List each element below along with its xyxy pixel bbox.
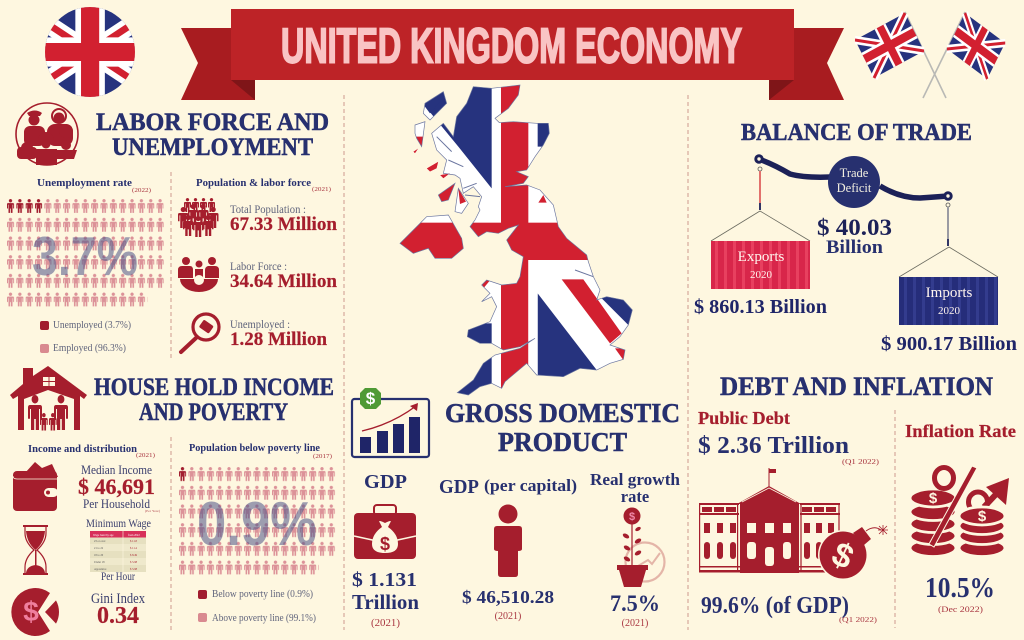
stat: unemployed bbox=[230, 319, 328, 350]
map outline accents bbox=[400, 85, 632, 395]
panel: household income and poverty bbox=[10, 366, 336, 636]
stat column: real growth rate: (2021) bbox=[622, 618, 648, 629]
stat: unemployed: Unemployed : bbox=[230, 319, 290, 331]
stat: 3.7%: 3.7% bbox=[32, 225, 138, 287]
stat: public debt: $ 2.36 Trillion bbox=[698, 433, 849, 459]
stat: minimum wage table: $ 8.49 bbox=[130, 554, 138, 557]
icon: gini pie: $ bbox=[23, 596, 39, 627]
subheading: population and labor force: (2021) bbox=[312, 186, 331, 193]
icon: money plant bbox=[617, 508, 664, 587]
panel: gross domestic product bbox=[352, 388, 680, 629]
stat column: real growth rate: rate bbox=[621, 487, 649, 506]
heading: inflation rate: Inflation Rate bbox=[905, 421, 1016, 441]
stat: minimum wage table: 18 to 20 bbox=[94, 554, 104, 557]
subheading: population and labor force bbox=[196, 177, 331, 193]
container: imports: Imports bbox=[926, 285, 972, 301]
heading: labor force: LABOR FORCE AND bbox=[96, 107, 329, 136]
stat column: gdp per capita: GDP bbox=[439, 476, 479, 498]
stat: minimum wage table: Wage band by age bbox=[93, 534, 114, 537]
title: UNITED KINGDOM ECONOMY bbox=[281, 20, 742, 74]
stat column: gdp: Trillion bbox=[352, 590, 419, 614]
subheading: income and distribution bbox=[28, 443, 155, 459]
chart: unemployment pictogram bbox=[7, 199, 164, 306]
stat: labor force bbox=[230, 261, 338, 292]
stat: trade deficit: Billion bbox=[826, 237, 883, 258]
heading: household income bbox=[94, 374, 334, 426]
stat: debt to gdp: 99.6% (of GDP) bbox=[701, 593, 849, 619]
stat column: gdp per capita: (2021) bbox=[495, 611, 521, 622]
label: trade deficit bbox=[837, 166, 872, 195]
stat column: gdp: $ 1.131 bbox=[352, 569, 417, 591]
container: exports bbox=[711, 167, 810, 289]
icon: gini pie bbox=[11, 588, 59, 636]
stat: minimum wage table: $ 5.98 bbox=[130, 561, 138, 564]
stat: gini index bbox=[91, 591, 146, 629]
icon: wallet bbox=[13, 462, 58, 511]
stat column: gdp per capita: $ 46,510.28 bbox=[462, 587, 554, 607]
stat: debt to gdp: (Q1 2022) bbox=[839, 615, 878, 624]
stat: public debt: (Q1 2022) bbox=[842, 457, 880, 466]
icon: labor gear bbox=[178, 257, 219, 292]
stat: gini index: 0.34 bbox=[97, 603, 139, 629]
heading: debt and inflation: DEBT AND INFLATION bbox=[720, 372, 993, 401]
chart: poverty pictogram bbox=[179, 467, 336, 574]
subheading: income and distribution: (2021) bbox=[136, 452, 155, 459]
subheading: income and distribution: Income and distribution bbox=[28, 443, 137, 455]
icon: briefcase bbox=[354, 505, 416, 559]
icon: crowd bbox=[178, 198, 218, 237]
subheading: unemployment rate bbox=[37, 177, 151, 194]
label: trade deficit: Trade bbox=[840, 166, 869, 180]
stat column: gdp per capita: (per capital) bbox=[484, 476, 577, 495]
stat column: gdp per capita bbox=[439, 476, 577, 622]
stat: minimum wage table: from 2022 bbox=[128, 534, 140, 537]
panel: debt and inflation bbox=[698, 372, 1016, 624]
legend: unemployed: Unemployed (3.7%) bbox=[53, 320, 131, 331]
subheading: population below poverty line: Population below poverty line bbox=[189, 442, 320, 454]
icon: growth chart: $ bbox=[366, 389, 376, 408]
heading: household income: HOUSE HOLD INCOME bbox=[94, 374, 334, 401]
stat: trade deficit: $ 40.03 bbox=[817, 215, 892, 240]
stat: total population: 67.33 Million bbox=[230, 215, 338, 235]
stat: trade deficit bbox=[817, 215, 892, 258]
subheading: unemployment rate: (2022) bbox=[132, 187, 151, 194]
heading: household income: AND POVERTY bbox=[139, 399, 288, 426]
stat: minimum wage table bbox=[86, 518, 151, 583]
icon: growth chart bbox=[352, 388, 429, 457]
stat: minimum wage table: Under 18 bbox=[94, 561, 105, 564]
title banner bbox=[181, 9, 844, 100]
icon: workers bbox=[16, 103, 78, 165]
heading: labor force bbox=[96, 107, 329, 161]
stat: minimum wage table: 21 to 22 bbox=[94, 547, 104, 550]
container: imports: 2020 bbox=[938, 305, 960, 317]
stat: imports value: $ 900.17 Billion bbox=[881, 334, 1017, 355]
container: exports: Exports bbox=[738, 249, 784, 265]
stat: labor force: 34.64 Million bbox=[230, 272, 338, 292]
heading: gdp: PRODUCT bbox=[498, 427, 627, 457]
icon: house with family bbox=[10, 366, 87, 430]
heading: labor force: UNEMPLOYMENT bbox=[112, 132, 313, 161]
stat: median income: (Per Year) bbox=[145, 509, 160, 513]
map: UK in flag colours bbox=[393, 80, 640, 400]
legend: poverty bbox=[198, 589, 316, 624]
stat: total population: Total Population : bbox=[230, 204, 306, 216]
panel: balance of trade bbox=[694, 119, 1017, 355]
container: imports bbox=[899, 203, 998, 325]
stat: median income: Median Income bbox=[81, 462, 152, 477]
stat column: gdp: (2021) bbox=[371, 618, 400, 629]
stat: minimum wage table: $ 5.98 bbox=[130, 568, 138, 571]
heading: balance of trade: BALANCE OF TRADE bbox=[741, 119, 972, 146]
icon: government building with bomb bbox=[699, 468, 888, 580]
legend: unemployed bbox=[40, 320, 131, 354]
stat: public debt: Public Debt bbox=[698, 408, 790, 428]
subheading: population below poverty line bbox=[189, 442, 332, 460]
icon: inflation coins: $ bbox=[929, 490, 938, 507]
panel: labor force and unemployment bbox=[7, 103, 338, 354]
stat column: real growth rate: Real growth bbox=[590, 470, 680, 489]
icon: crossed union flags bbox=[855, 12, 1005, 98]
stat: minimum wage table: Apprentice bbox=[94, 568, 107, 571]
stat: inflation: 10.5% bbox=[925, 573, 995, 604]
icon: money plant: $ bbox=[629, 511, 635, 523]
icon: government building with bomb: $ bbox=[826, 535, 859, 577]
label: trade deficit: Deficit bbox=[837, 181, 872, 195]
stat column: gdp: GDP bbox=[364, 471, 407, 493]
stat: median income bbox=[78, 462, 160, 513]
stat: unemployed: 1.28 Million bbox=[230, 330, 328, 350]
subheading: population below poverty line: (2017) bbox=[313, 453, 332, 460]
icon: round union flag bbox=[45, 7, 135, 97]
stat column: gdp bbox=[352, 471, 419, 629]
icon: person bbox=[494, 504, 522, 577]
heading: gdp: GROSS DOMESTIC bbox=[445, 398, 680, 428]
stat: minimum wage table: 23 or over bbox=[94, 540, 106, 543]
icon: inflation coins: $ bbox=[978, 508, 987, 525]
stat: exports value: $ 860.13 Billion bbox=[694, 297, 827, 318]
stat column: real growth rate: 7.5% bbox=[610, 591, 660, 616]
subheading: population and labor force: Population & labor force bbox=[196, 177, 311, 189]
stat: labor force: Labor Force : bbox=[230, 261, 287, 273]
stat: minimum wage table: Per Hour bbox=[101, 571, 135, 583]
heading: gdp bbox=[445, 398, 680, 457]
stat: minimum wage table: $ 11.4 bbox=[130, 547, 137, 550]
icon: briefcase: $ bbox=[380, 534, 390, 554]
icon: magnifier with case bbox=[181, 314, 219, 352]
stat column: real growth rate bbox=[590, 470, 680, 629]
icon: hourglass bbox=[23, 525, 48, 575]
container: exports: 2020 bbox=[750, 269, 772, 281]
subheading: unemployment rate: Unemployment rate bbox=[37, 177, 132, 189]
stat: minimum wage table: $ 11.8 bbox=[130, 540, 137, 543]
icon: balance beam bbox=[756, 156, 951, 208]
legend: unemployed: Employed (96.3%) bbox=[53, 343, 126, 354]
stat: public debt bbox=[698, 408, 880, 466]
stat: median income: Per Household bbox=[83, 496, 150, 511]
stat: total population bbox=[230, 204, 338, 235]
legend: poverty: Above poverty line (99.1%) bbox=[212, 613, 316, 624]
stat: 0.9%: 0.9% bbox=[197, 490, 317, 559]
stat: inflation: (Dec 2022) bbox=[938, 604, 983, 614]
stat: median income: $ 46,691 bbox=[78, 474, 155, 499]
legend: poverty: Below poverty line (0.9%) bbox=[212, 589, 313, 600]
stat: gini index: Gini Index bbox=[91, 591, 146, 607]
icon: inflation coins bbox=[910, 466, 1009, 556]
stat: minimum wage table: Minimum Wage bbox=[86, 518, 151, 530]
